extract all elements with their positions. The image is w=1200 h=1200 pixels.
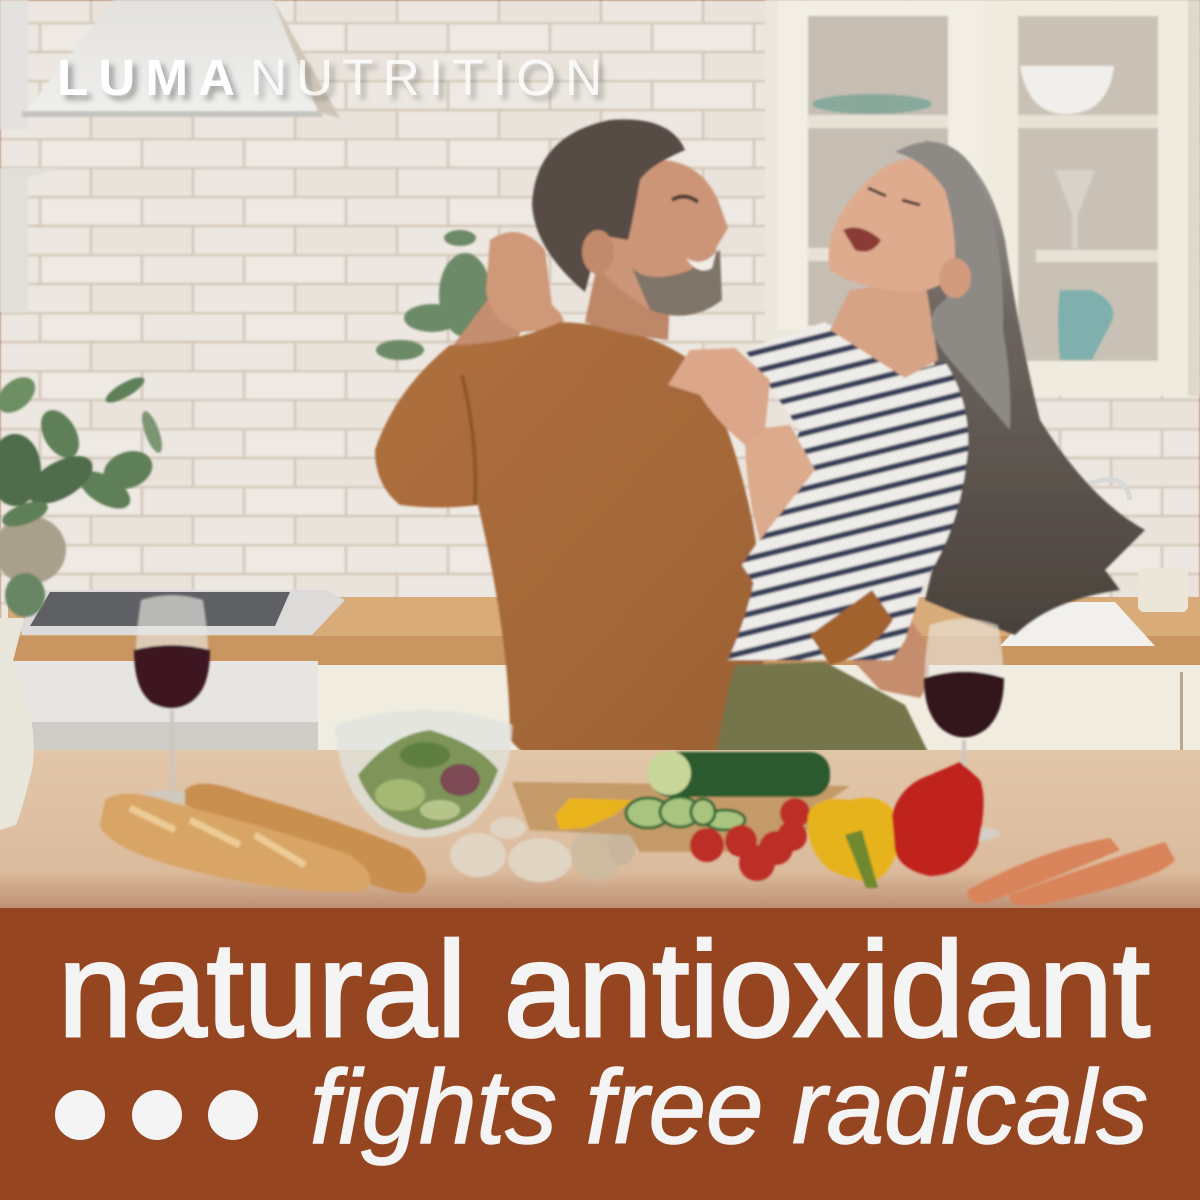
man's neck <box>585 270 670 340</box>
wall plant behind hands <box>376 230 491 360</box>
island counter <box>0 750 1200 910</box>
woman's hair top <box>895 142 1010 430</box>
red bell pepper <box>892 762 984 876</box>
left wall shelf <box>0 168 62 312</box>
woman's sleeve <box>742 400 968 621</box>
skirt <box>715 662 932 760</box>
man's eye <box>672 196 698 202</box>
back worktop <box>8 597 1200 637</box>
cabinet dishes <box>812 94 932 114</box>
LUMA wordmark: LUMA <box>57 49 235 106</box>
woman's shirt <box>728 322 968 660</box>
sink <box>1000 602 1155 646</box>
leaves <box>0 370 166 617</box>
man's smile <box>686 252 716 270</box>
man's hand on back <box>840 592 929 698</box>
subheadline: fights free radicals <box>310 1049 1148 1166</box>
sweater cuff <box>810 590 893 665</box>
joined hands <box>486 232 564 332</box>
wall cabinets <box>765 0 1200 396</box>
brick wall <box>0 0 1200 620</box>
man's hair <box>532 119 685 292</box>
woman's long hair <box>920 140 1145 635</box>
three dots <box>55 1090 258 1140</box>
woman's laugh <box>843 228 881 252</box>
chopping board <box>512 782 850 852</box>
man's raised arm <box>433 290 530 390</box>
logo <box>57 49 602 106</box>
tomatoes <box>690 798 810 881</box>
headline: natural antioxidant <box>58 914 1150 1065</box>
carrots <box>968 838 1175 906</box>
woman's ear <box>939 258 971 298</box>
woman's eyes <box>868 188 920 205</box>
base cabinets <box>318 665 1200 765</box>
food and tableware <box>100 595 1175 906</box>
yellow pepper strips <box>555 798 632 830</box>
dried flowers <box>0 516 66 584</box>
salad bowl <box>335 710 513 838</box>
left column <box>0 0 28 130</box>
man's sweater <box>375 322 763 755</box>
cucumber whole <box>647 751 830 797</box>
man's beard <box>632 250 722 316</box>
tap <box>1075 480 1130 500</box>
hob <box>20 590 345 635</box>
yellow bell pepper <box>808 798 900 888</box>
sleeve fold <box>462 375 475 505</box>
wine glass right <box>924 618 1004 841</box>
man's face <box>595 160 728 316</box>
cucumber slices <box>626 797 745 830</box>
baguettes <box>100 784 426 893</box>
woman's face <box>829 159 965 292</box>
jar <box>1138 568 1188 612</box>
left lower wall <box>0 620 8 760</box>
oven <box>5 661 318 753</box>
vase <box>0 618 34 830</box>
woman's arm <box>745 425 815 540</box>
mushrooms <box>450 817 636 882</box>
left plant <box>0 370 166 617</box>
kitchen background <box>0 0 1200 765</box>
wine glass left <box>134 595 210 804</box>
couple dancing <box>375 119 1145 760</box>
banner background <box>0 908 1200 1200</box>
man's ear <box>582 230 614 274</box>
NUTRITION wordmark: NUTRITION <box>250 49 602 106</box>
woman's neck <box>830 280 938 378</box>
range hood <box>22 0 340 118</box>
woman's hand <box>668 348 770 445</box>
